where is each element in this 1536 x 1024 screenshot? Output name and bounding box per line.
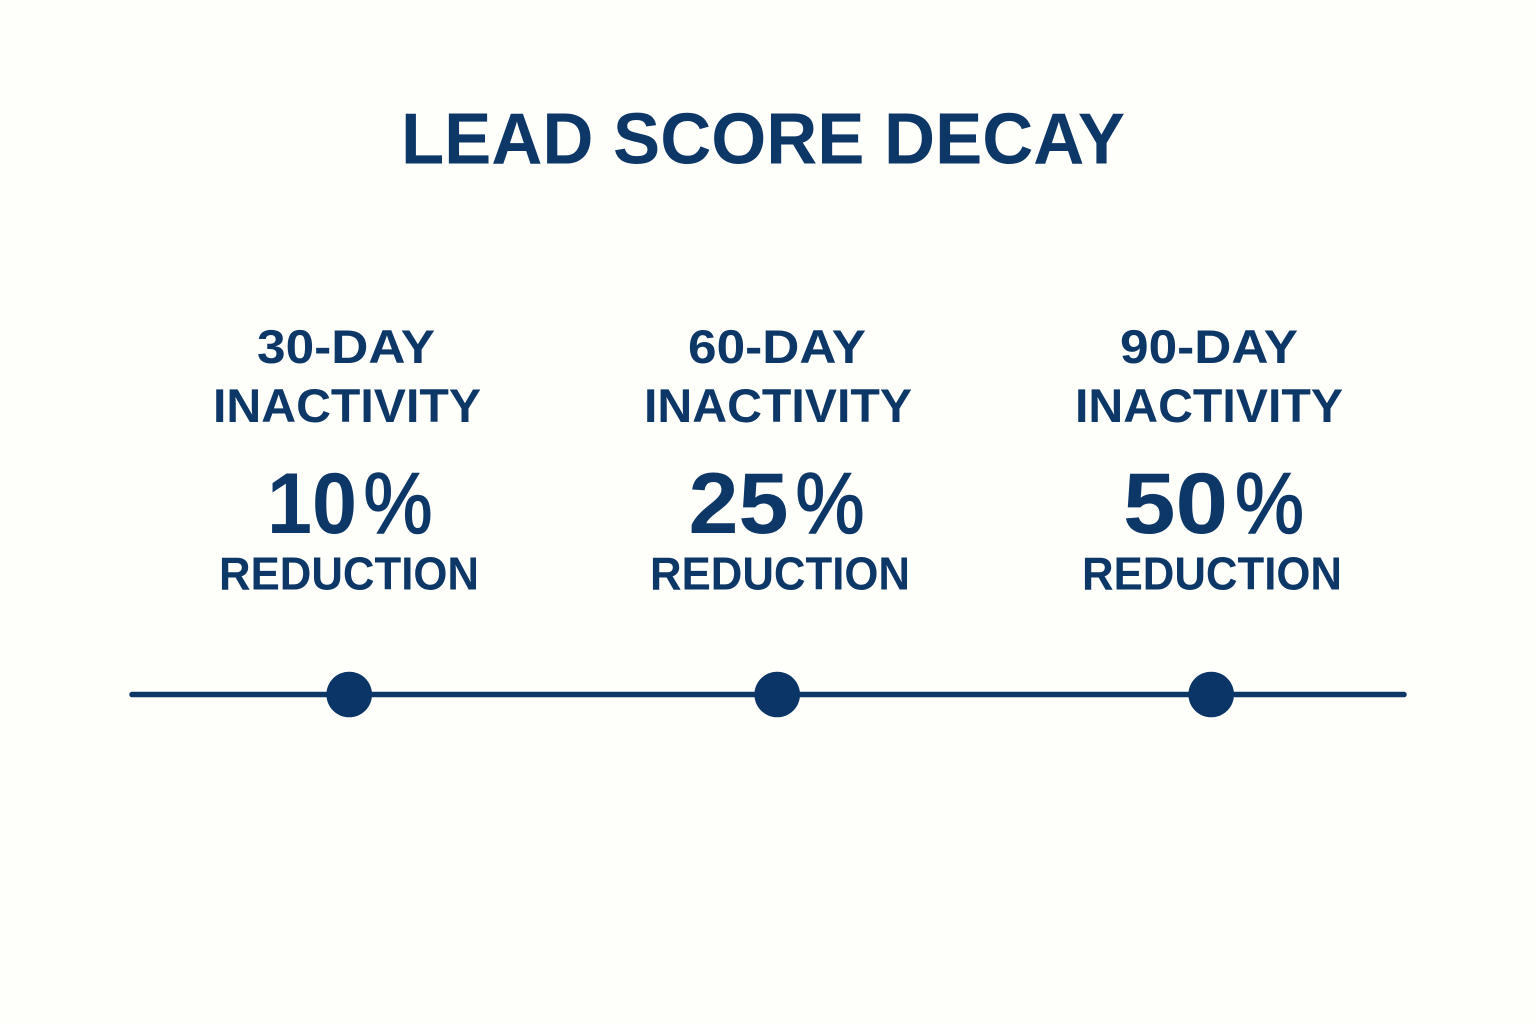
column: 30-day xyxy=(213,320,481,600)
label: 90-day inactivity: INACTIVITY xyxy=(1075,379,1343,432)
value: 25% xyxy=(688,456,864,552)
value: 25%: % xyxy=(796,456,864,552)
marker: 30 days xyxy=(326,672,372,717)
timeline xyxy=(132,672,1404,717)
value: 50%: % xyxy=(1235,456,1304,552)
label: 90-day inactivity xyxy=(1075,320,1343,432)
title: LEAD SCORE DECAY xyxy=(401,100,1125,180)
value: 10% xyxy=(267,456,432,552)
label: 60-day inactivity xyxy=(644,320,912,432)
column: 60-day xyxy=(644,320,912,600)
label: 60-day inactivity: 60-DAY xyxy=(688,320,866,373)
label: 30-day inactivity: 30-DAY xyxy=(257,320,435,373)
column: 90-day xyxy=(1075,320,1343,600)
label: reduction: REDUCTION xyxy=(1082,548,1342,600)
timeline line xyxy=(132,692,1404,697)
label: 30-day inactivity xyxy=(213,320,481,432)
marker: 90 days xyxy=(1188,672,1234,717)
value: 50%: 50 xyxy=(1123,456,1228,552)
label: 60-day inactivity: INACTIVITY xyxy=(644,379,912,432)
value: 10%: % xyxy=(364,456,432,552)
value: 10%: 10 xyxy=(267,456,357,552)
marker: 60 days xyxy=(754,672,800,717)
label: reduction: REDUCTION xyxy=(219,548,479,600)
label: reduction: REDUCTION xyxy=(650,548,910,600)
value: 25%: 25 xyxy=(688,456,788,552)
value: 50% xyxy=(1123,456,1304,552)
label: 90-day inactivity: 90-DAY xyxy=(1120,320,1298,373)
label: 30-day inactivity: INACTIVITY xyxy=(213,379,481,432)
